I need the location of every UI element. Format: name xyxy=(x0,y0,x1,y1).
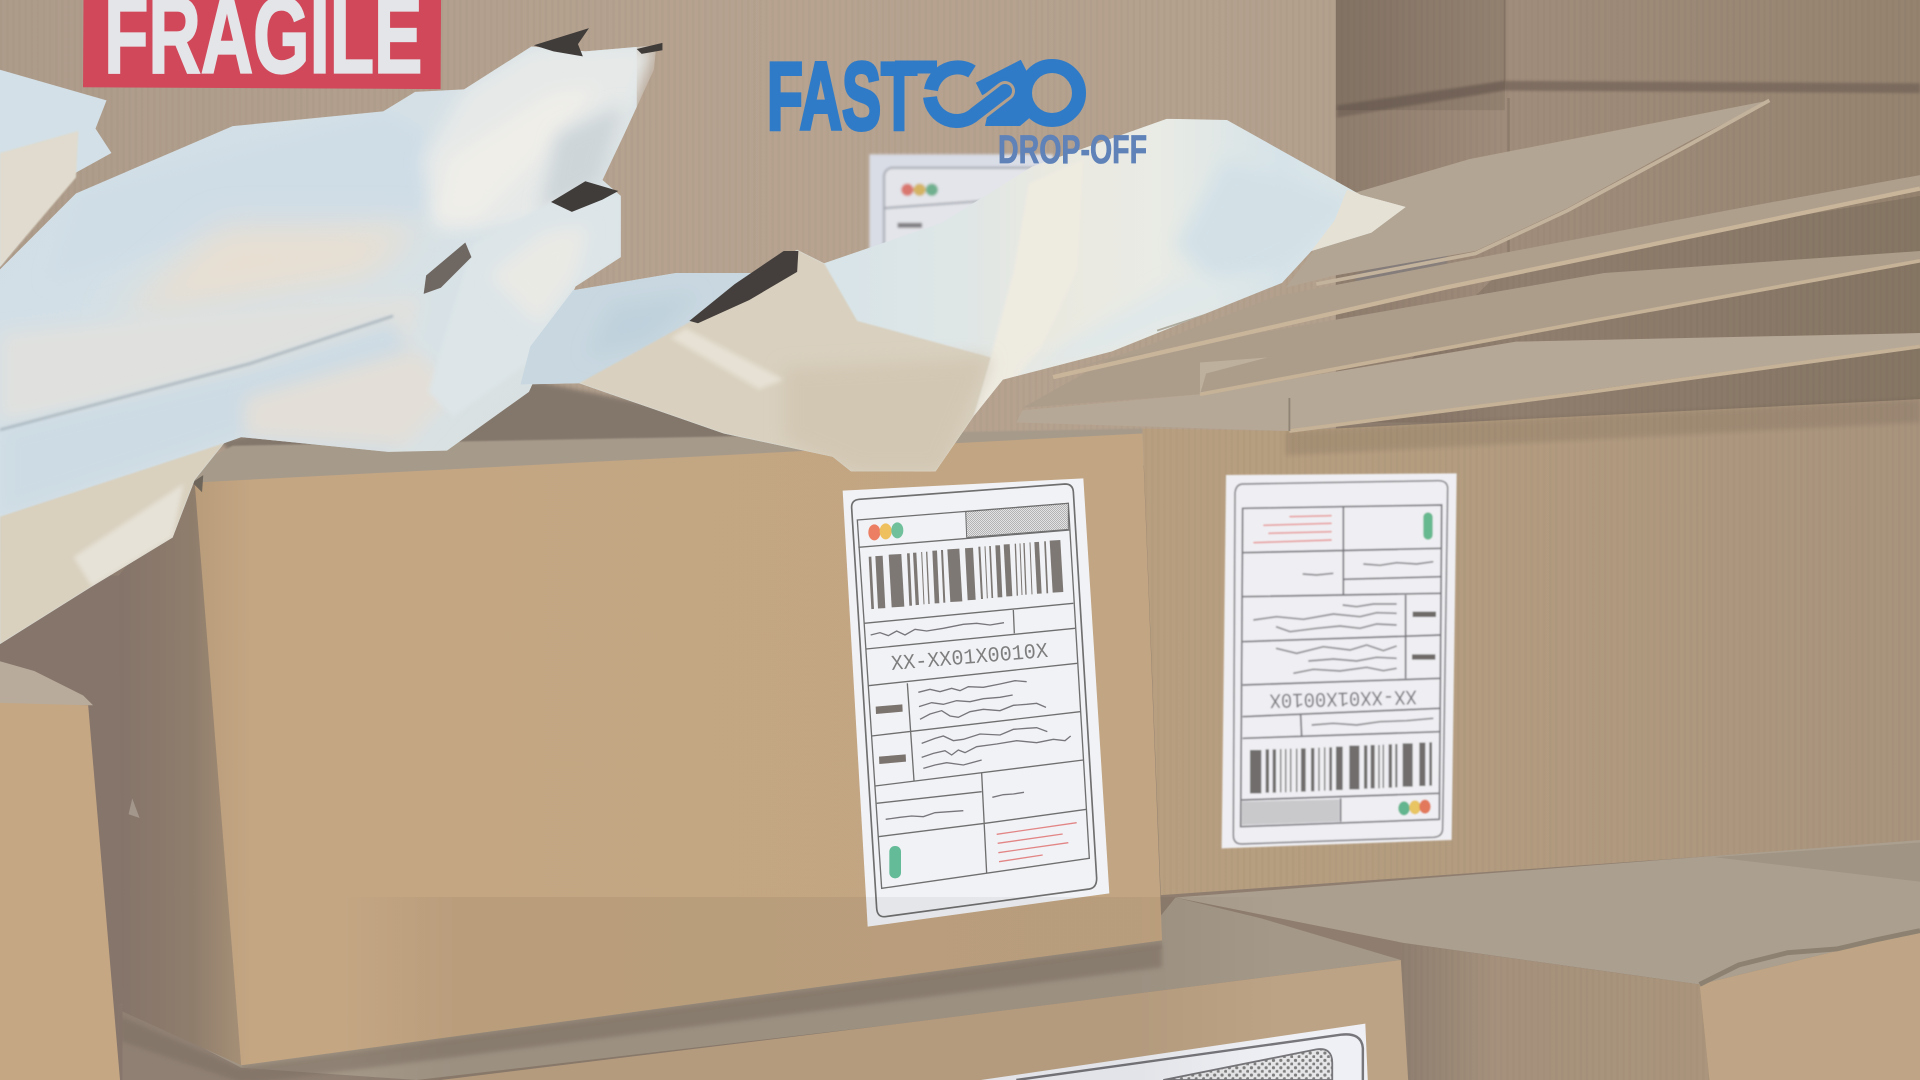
main parcel xyxy=(119,429,1162,1071)
right parcel shipping label, upside down xyxy=(1222,473,1457,848)
barcode xyxy=(1256,742,1431,793)
scribbled text lines xyxy=(871,623,1071,819)
green status pill xyxy=(1423,512,1433,540)
tracking code: XX-XX01X0010X xyxy=(1269,684,1417,711)
coloured dots xyxy=(868,522,903,540)
background shipping label xyxy=(869,154,1056,264)
lower parcel shipping label xyxy=(981,1024,1368,1080)
shaded lower band overlay xyxy=(340,897,1280,1080)
logo subtitle DROP-OFF: DROP-OFF xyxy=(998,128,1147,172)
logo mark: linked GO rings xyxy=(895,66,1079,126)
hatched box xyxy=(966,503,1068,537)
hatched box xyxy=(1242,799,1339,825)
red address lines xyxy=(1253,516,1332,543)
red address lines xyxy=(997,823,1077,862)
back centre box xyxy=(0,0,1336,465)
barcode xyxy=(870,540,1058,609)
lower centre parcel xyxy=(119,898,1408,1080)
coloured dots xyxy=(1398,800,1431,815)
black dash markers xyxy=(1412,614,1436,657)
shipping parcel mailer centre xyxy=(514,110,1420,478)
logo wordmark FAST: FAST xyxy=(767,43,917,150)
left parcel xyxy=(0,576,122,1080)
label grid lines xyxy=(857,503,1089,888)
scribbled text lines xyxy=(1253,562,1433,725)
back right box stack xyxy=(1336,0,1920,422)
main parcel shipping label xyxy=(843,478,1109,927)
flattened cardboard sheets xyxy=(1016,100,1920,431)
label grid lines xyxy=(1241,505,1442,827)
plastic mailer top left corner xyxy=(0,70,111,267)
black dash markers xyxy=(876,704,906,764)
shadow beneath plastic mailers xyxy=(220,380,833,460)
green status pill xyxy=(889,846,901,878)
right large parcel xyxy=(1142,399,1920,895)
black tape strip on centre mailer xyxy=(689,251,798,323)
lower right parcel xyxy=(1176,840,1920,1080)
crumpled plastic mailer left xyxy=(0,37,656,649)
logo: Fastgo Drop-Off xyxy=(767,43,1147,172)
tracking code: XX-XX01X0010X xyxy=(890,640,1049,677)
FRAGILE sticker xyxy=(83,0,441,95)
black tape strips on left mailer xyxy=(534,28,662,212)
